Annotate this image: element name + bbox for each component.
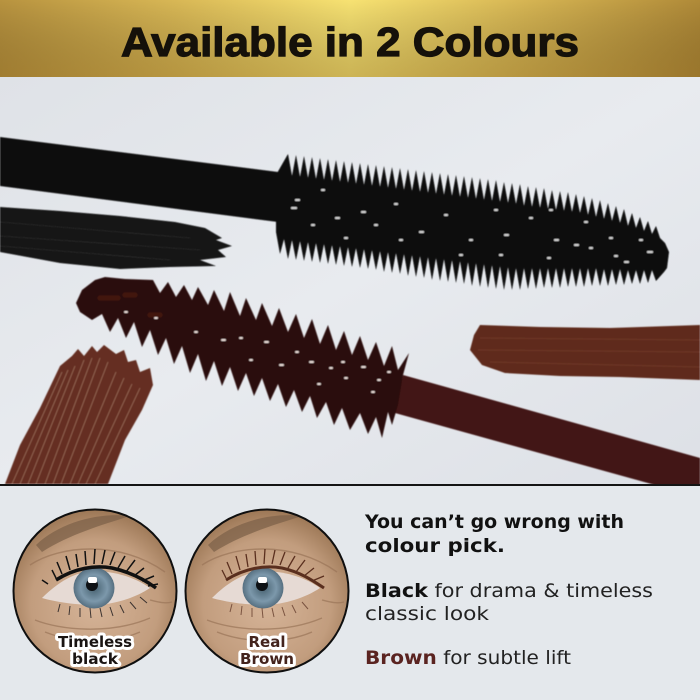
lower lashes <box>230 602 308 618</box>
photo background <box>0 77 700 485</box>
brown mascara brush <box>76 277 409 438</box>
headline copy <box>364 511 624 557</box>
iris <box>242 568 284 608</box>
brown mascara swatch right <box>470 325 700 380</box>
headline copy: You can’t go wrong with <box>364 511 624 533</box>
black description: Black for drama & timeless <box>365 580 653 602</box>
label: real brown <box>240 633 294 668</box>
title: Available in 2 Colours <box>121 19 579 65</box>
headline copy: colour pick. <box>365 535 505 557</box>
eye white <box>212 571 320 605</box>
brown upper lashes <box>226 567 324 588</box>
copy block <box>364 511 653 669</box>
eyebrow <box>208 515 302 552</box>
eyebrow <box>36 515 130 552</box>
label: timeless black: Timeless <box>58 633 132 651</box>
black description <box>365 580 653 625</box>
black mascara wand <box>0 137 278 222</box>
black description: classic look <box>365 603 489 625</box>
eye circle: real brown <box>185 508 349 674</box>
eye crease and wrinkles <box>202 549 344 641</box>
iris <box>74 568 114 608</box>
bottom panel <box>0 486 700 700</box>
brown mascara swatch left <box>5 345 153 484</box>
catchlight <box>258 577 267 583</box>
label: timeless black <box>58 633 132 668</box>
header banner <box>0 0 700 77</box>
lower lashes <box>58 597 147 618</box>
product photo: mascara wands and swatches <box>0 137 700 485</box>
eye circle: timeless black <box>13 508 177 674</box>
divider line <box>0 484 700 486</box>
black upper lashes <box>56 567 156 588</box>
pupil <box>86 580 98 591</box>
label: real brown: Brown <box>240 650 294 668</box>
catchlight <box>88 577 97 583</box>
eye crease and wrinkles <box>30 549 172 641</box>
black mascara swatch <box>0 207 232 269</box>
black mascara brush <box>276 154 669 290</box>
label: real brown: Real <box>248 633 286 651</box>
brown mascara wand <box>395 375 700 485</box>
label: timeless black: black <box>72 650 119 668</box>
brown description: Brown for subtle lift <box>365 647 571 669</box>
eye white <box>42 571 150 605</box>
pupil <box>256 580 268 591</box>
